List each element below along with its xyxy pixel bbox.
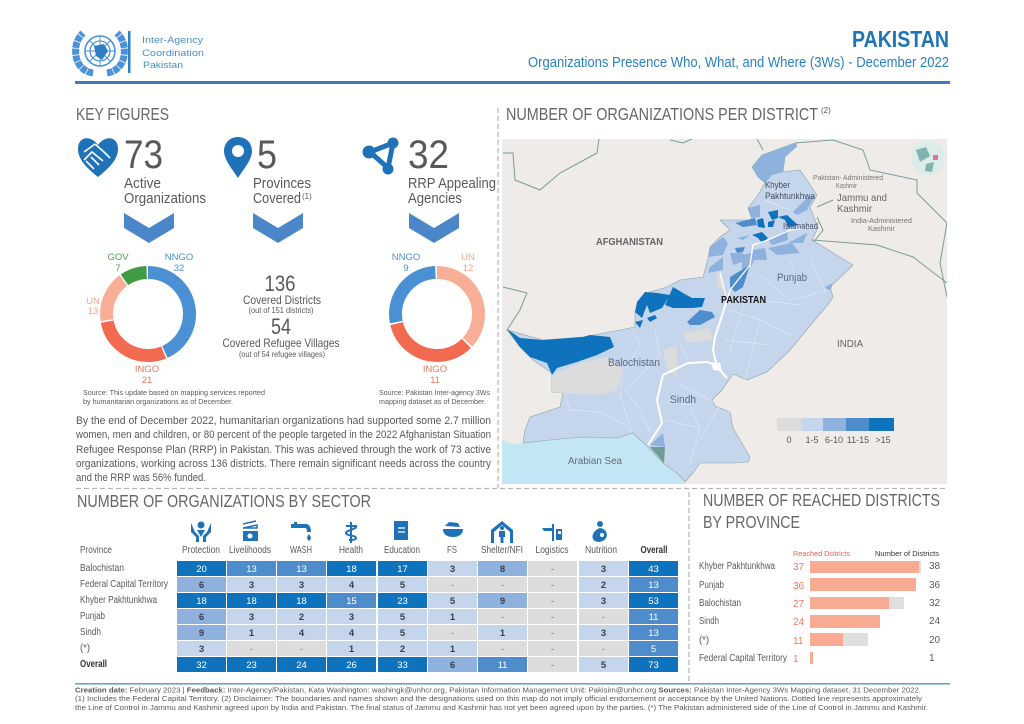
footer notes: (1) Includes the Federal Capital Territory. (2) Disclaimer: The boundaries and names shown and the designations used on this map do not imply official endorsement or acceptance by the United Nations. Dotted line represents approximately <box>75 694 922 703</box>
reached values: 11 <box>793 636 804 647</box>
table row: Khyber Pakhtunkhwa: 53 <box>648 596 659 607</box>
table row: Pakistan administered Kashmir: 1 <box>450 644 456 655</box>
label: (1) <box>302 192 312 201</box>
label: Covered <box>253 191 301 207</box>
header <box>76 26 949 73</box>
summary paragraph: and the RRP was 56% funded. <box>76 472 206 484</box>
logo text: Coordination <box>142 48 204 59</box>
row labels: Balochistan <box>80 563 124 574</box>
total values: 32 <box>929 598 941 609</box>
chevron <box>253 213 303 243</box>
table row: Pakistan administered Kashmir: 1 <box>349 644 355 655</box>
chart province labels: Khyber Pakhtunkhwa <box>699 561 775 572</box>
map: province boundaries <box>648 227 815 445</box>
summary paragraph <box>75 415 491 484</box>
table row: Sindh: - <box>451 628 454 639</box>
source notes: Source: Pakistan Inter-agency 3Ws <box>379 388 490 397</box>
row labels: Sindh <box>80 627 101 638</box>
table row: Overall: 6 <box>450 660 455 671</box>
row labels: Overall <box>80 659 107 670</box>
table row: Khyber Pakhtunkhwa <box>177 593 678 608</box>
column headers: Livelihoods <box>229 545 271 556</box>
table row: Overall: 73 <box>648 660 659 671</box>
donut labels: NNGO <box>165 252 193 263</box>
donut labels: UN <box>461 252 475 263</box>
chart province labels: Punjab <box>699 580 724 591</box>
table row: Khyber Pakhtunkhwa: - <box>551 596 554 607</box>
icon: logistics <box>542 524 562 541</box>
chevron <box>124 213 174 243</box>
label: Organizations <box>124 191 206 207</box>
donut labels: 9 <box>403 263 409 274</box>
table row: Pakistan administered Kashmir: - <box>501 644 504 655</box>
reached values <box>793 562 805 665</box>
map legend: 11-15 <box>847 435 869 445</box>
table row: Balochistan: 3 <box>450 564 455 575</box>
chart province labels: Federal Capital Territory <box>699 653 787 664</box>
donut labels: 32 <box>174 263 184 274</box>
label: Provinces <box>253 176 311 192</box>
map: place labels: Kashmir <box>837 203 872 215</box>
label: Active <box>124 176 161 192</box>
row labels: Punjab <box>80 611 105 622</box>
source notes: Source: This update based on mapping services reported <box>83 388 265 397</box>
covered districts and villages: (out of 54 refugee villages) <box>239 350 325 359</box>
column headers: WASH <box>290 545 312 556</box>
map: place labels: Islamabad <box>783 221 818 232</box>
map: place labels: Pakhtunkhwa <box>765 191 816 202</box>
label <box>124 176 206 207</box>
column headers: Education <box>384 545 420 556</box>
heading: organizations per district: NUMBER OF ORGANIZATIONS PER DISTRICT <box>506 104 818 124</box>
map: white capital patch <box>711 362 722 371</box>
map legend: 1-5 <box>805 435 819 445</box>
table row: Khyber Pakhtunkhwa: 9 <box>500 596 505 607</box>
table row: Sindh: 13 <box>648 628 659 639</box>
reached values: 36 <box>793 581 805 592</box>
table row: Sindh: 1 <box>249 628 255 639</box>
donut labels: UN <box>86 296 100 307</box>
summary paragraph: women, men and children, or 80 percent of the people targeted in the 2022 Afghanistan Situation <box>75 429 491 441</box>
covered districts and villages: Covered Refugee Villages <box>222 336 340 350</box>
donut chart: appealing agencies <box>392 252 478 386</box>
row labels: Khyber Pakhtunkhwa <box>80 595 157 606</box>
footer notes: the Line of Control in Jammu and Kashmir agreed upon by India and Pakistan. The final status of Jammu and Kashmir has not yet been agreed upon by the parties. (*) The Pakistan administered side of the Line of Control in Jammu and Kashmir. <box>75 703 928 712</box>
chart province labels: (*) <box>699 635 709 646</box>
icon: education <box>394 521 408 540</box>
map: districts with no organizations <box>552 272 725 395</box>
total values: 36 <box>929 580 941 591</box>
donut labels: 13 <box>88 306 98 317</box>
column headers: Province <box>80 545 112 556</box>
total values: 20 <box>929 635 941 646</box>
table row: Balochistan: 3 <box>601 564 606 575</box>
donut labels <box>86 252 193 386</box>
table row: Pakistan administered Kashmir <box>177 641 678 656</box>
summary paragraph: Refugee Response Plan (RRP) in Pakistan. This was achieved through the work of 73 active <box>76 444 491 456</box>
map: international borders <box>503 139 947 330</box>
total values: 38 <box>929 561 941 572</box>
map legend <box>777 418 894 445</box>
table row: Punjab: 3 <box>249 612 254 623</box>
table row: Pakistan administered Kashmir: 3 <box>199 644 204 655</box>
map: districts with more than 15 organizations <box>507 210 798 375</box>
table row: Sindh: 1 <box>500 628 506 639</box>
sector table <box>80 521 678 672</box>
donut labels <box>392 252 475 386</box>
table row: Punjab: - <box>602 612 605 623</box>
number 73: 73 <box>124 133 163 177</box>
table row: Balochistan: 17 <box>397 564 408 575</box>
table row: Pakistan administered Kashmir: 5 <box>651 644 656 655</box>
table row: Khyber Pakhtunkhwa: 18 <box>196 596 207 607</box>
label <box>408 176 496 207</box>
covered districts and villages <box>222 271 340 359</box>
table row: Sindh: 9 <box>199 628 204 639</box>
table row: Balochistan: 13 <box>246 564 257 575</box>
table row: Khyber Pakhtunkhwa: 15 <box>346 596 357 607</box>
icon: food security <box>443 522 463 537</box>
reached values: 37 <box>793 562 805 573</box>
chart column headers: Number of Districts <box>875 549 939 558</box>
map: karachi and delta <box>650 433 665 447</box>
table row: Balochistan: 20 <box>196 564 207 575</box>
heading: reached districts by province: BY PROVINCE <box>703 512 800 532</box>
table row: Khyber Pakhtunkhwa: 5 <box>450 596 456 607</box>
table row: Federal Capital Territory: - <box>451 580 454 591</box>
table row: Sindh: 4 <box>349 628 355 639</box>
table row: Overall <box>177 657 678 672</box>
key figure: RRP appealing agencies <box>362 133 496 243</box>
table row: Federal Capital Territory <box>177 577 678 592</box>
column headers: Logistics <box>536 545 568 556</box>
chart province labels: Sindh <box>699 616 719 627</box>
summary paragraph: organizations, working across 136 districts. There remain significant needs across the country <box>76 458 491 470</box>
chart province labels <box>699 561 787 664</box>
table row: Punjab: 6 <box>199 612 204 623</box>
table row: Punjab: - <box>501 612 504 623</box>
reached district bars <box>810 561 919 664</box>
chart column headers: Reached Districts <box>793 549 850 558</box>
donut labels: 7 <box>115 263 121 274</box>
table row: Khyber Pakhtunkhwa: 3 <box>601 596 606 607</box>
table row: Overall: 11 <box>498 660 507 671</box>
table row: Balochistan <box>177 561 678 576</box>
table row: Federal Capital Territory: - <box>551 580 554 591</box>
reached values: 27 <box>793 599 805 610</box>
footer notes <box>75 686 928 712</box>
total values: 24 <box>929 616 941 627</box>
icon: UN emblem <box>76 33 124 73</box>
covered districts and villages: 136 <box>264 271 296 296</box>
donut labels: INGO <box>423 364 447 375</box>
table row: Balochistan: 8 <box>500 564 505 575</box>
map: place labels: Kashmir <box>868 224 895 233</box>
column headers: Nutrition <box>585 545 617 556</box>
table row: Federal Capital Territory: - <box>501 580 504 591</box>
table row: Federal Capital Territory: 6 <box>199 580 204 591</box>
logo text: Inter-Agency <box>142 35 203 46</box>
column headers: FS <box>447 545 457 556</box>
table row: Overall: 23 <box>246 660 257 671</box>
table row: Federal Capital Territory: 2 <box>601 580 606 591</box>
heading: reached districts by province: NUMBER OF REACHED DISTRICTS <box>703 490 940 510</box>
table row: Federal Capital Territory: 3 <box>299 580 304 591</box>
label <box>253 176 312 207</box>
map legend: 0 <box>786 435 792 445</box>
label: Agencies <box>408 191 462 207</box>
map: place labels: AFGHANISTAN <box>596 236 663 248</box>
source notes <box>83 388 490 406</box>
column headers <box>80 545 668 556</box>
table row: Sindh <box>177 625 678 640</box>
table row: Punjab: 5 <box>400 612 406 623</box>
reached values: 24 <box>793 617 805 628</box>
total values: 1 <box>929 653 935 664</box>
donut labels: 11 <box>430 375 440 386</box>
table row: Balochistan: - <box>551 564 554 575</box>
heading: key figures: KEY FIGURES <box>76 104 169 124</box>
donut labels: 12 <box>463 263 473 274</box>
table row: Overall: 5 <box>601 660 607 671</box>
map: place labels: India-Administered <box>851 216 912 225</box>
map: district boundaries <box>565 180 830 462</box>
footer notes: Creation date: February 2023 | Feedback: Inter-Agency/Pakistan, Kata Washington: washingk@unhcr.org, Pakistan Information Management Unit: Pakisim@unhcr.org Sources: Pakistan Inter-Agency 3Ws Mapping dataset, 31 December 2022. <box>75 686 921 694</box>
icon: nutrition <box>593 521 607 542</box>
map: place labels: Punjab <box>777 272 807 284</box>
chart province labels: Balochistan <box>699 598 741 609</box>
table row: Punjab: 11 <box>649 612 658 623</box>
table row: Sindh: 4 <box>299 628 305 639</box>
table row: Federal Capital Territory: 3 <box>249 580 254 591</box>
column headers: Protection <box>182 545 220 556</box>
number 5: 5 <box>257 133 277 177</box>
table row: Balochistan: 43 <box>648 564 659 575</box>
map legend: 6-10 <box>825 435 843 445</box>
reached values: 1 <box>793 654 799 665</box>
logo text: Pakistan <box>143 60 183 71</box>
bar chart: reached districts <box>699 549 941 665</box>
icon: network <box>362 138 398 174</box>
subtitle: Organizations Presence Who, What, and Where (3Ws) - December 2022 <box>528 54 949 71</box>
map: place labels: Arabian Sea <box>568 455 622 467</box>
heading: organizations by sector: NUMBER OF ORGANIZATIONS BY SECTOR <box>77 491 371 511</box>
icon: livelihoods <box>243 521 258 541</box>
column headers: Overall <box>640 545 668 556</box>
total values <box>929 561 941 664</box>
icon: map pin <box>224 137 252 178</box>
table row: Pakistan administered Kashmir: 2 <box>400 644 405 655</box>
map: districts with 6 to 10 organizations <box>708 143 833 292</box>
table row: Overall: 24 <box>296 660 307 671</box>
donut labels: INGO <box>135 364 159 375</box>
map: districts with 11 to 15 organizations <box>687 218 757 325</box>
donut chart: organizations by type <box>86 252 193 386</box>
row labels: Federal Capital Territory <box>80 579 168 590</box>
map: place labels: Balochistan <box>608 357 660 369</box>
dividers <box>76 108 948 682</box>
icon: shelter <box>491 521 513 543</box>
table row: Khyber Pakhtunkhwa: 18 <box>246 596 257 607</box>
table row: Sindh: 3 <box>601 628 606 639</box>
donut labels: NNGO <box>392 252 420 263</box>
table row: Punjab: 2 <box>299 612 304 623</box>
map: arabian sea <box>502 433 685 484</box>
map: place labels: Pakistan- Administered <box>813 173 883 182</box>
number 32: 32 <box>408 133 449 177</box>
chevron <box>409 213 459 243</box>
row labels: (*) <box>80 643 90 654</box>
table row: Punjab: 3 <box>349 612 354 623</box>
table row: Pakistan administered Kashmir: - <box>551 644 554 655</box>
key figure: provinces covered <box>224 133 312 243</box>
icon: locator globe <box>911 141 945 175</box>
map: pakistan base <box>507 143 853 482</box>
map: place labels: Kashmir <box>836 181 857 190</box>
icon: protection <box>191 522 211 542</box>
table row: Khyber Pakhtunkhwa: 23 <box>397 596 408 607</box>
map <box>502 139 947 484</box>
table row: Overall: 26 <box>346 660 357 671</box>
heading: reached districts by province <box>703 490 940 532</box>
logo text <box>142 35 204 71</box>
column headers: Shelter/NFI <box>481 545 523 556</box>
donut labels: 21 <box>142 375 152 386</box>
table row: Khyber Pakhtunkhwa: 18 <box>296 596 307 607</box>
table row: Punjab <box>177 609 678 624</box>
total district bars <box>810 561 921 664</box>
icon: wash <box>291 522 311 541</box>
table row: Overall: 33 <box>397 660 408 671</box>
summary paragraph: By the end of December 2022, humanitarian organizations had supported some 2.7 million <box>76 415 491 427</box>
label: RRP Appealing <box>408 176 496 192</box>
table row: Overall: - <box>551 660 554 671</box>
map: place labels: INDIA <box>837 338 863 350</box>
map: place labels: Khyber <box>765 180 790 191</box>
heading footnote marker: (2) <box>821 106 831 115</box>
table row: Federal Capital Territory: 13 <box>648 580 659 591</box>
table row: Balochistan: 13 <box>296 564 307 575</box>
icon: handshake heart <box>78 138 118 177</box>
map: place labels <box>568 173 912 467</box>
key figure: active organizations <box>78 133 206 243</box>
column headers: Health <box>339 545 363 556</box>
table row: Balochistan: 18 <box>346 564 357 575</box>
chart column headers <box>793 549 939 558</box>
table row: Punjab: 1 <box>450 612 456 623</box>
map: place labels: Sindh <box>670 394 696 406</box>
table row: Sindh: 5 <box>400 628 406 639</box>
table row: Federal Capital Territory: 5 <box>400 580 406 591</box>
row labels <box>80 563 168 670</box>
table row: Pakistan administered Kashmir: - <box>300 644 303 655</box>
map: place labels: PAKISTAN <box>721 294 766 306</box>
map: place labels: Jammu and <box>837 192 887 204</box>
source notes: mapping dataset as of December. <box>379 397 486 406</box>
table row: Pakistan administered Kashmir: - <box>602 644 605 655</box>
covered districts and villages: (out of 151 districts) <box>248 306 314 315</box>
table row: Overall: 32 <box>196 660 207 671</box>
logo divider <box>128 31 130 73</box>
table row: Federal Capital Territory: 4 <box>349 580 355 591</box>
donut labels: GOV <box>107 252 129 263</box>
icon: health <box>346 522 356 543</box>
covered districts and villages: Covered Districts <box>243 293 321 307</box>
table row: Sindh: - <box>551 628 554 639</box>
table row: Pakistan administered Kashmir: - <box>250 644 253 655</box>
title: PAKISTAN <box>852 26 949 52</box>
source notes: by humanitarian organizations as of December. <box>83 397 233 406</box>
covered districts and villages: 54 <box>271 314 291 339</box>
map legend: >15 <box>875 435 891 445</box>
sector icons <box>191 521 607 543</box>
table row: Punjab: - <box>551 612 554 623</box>
